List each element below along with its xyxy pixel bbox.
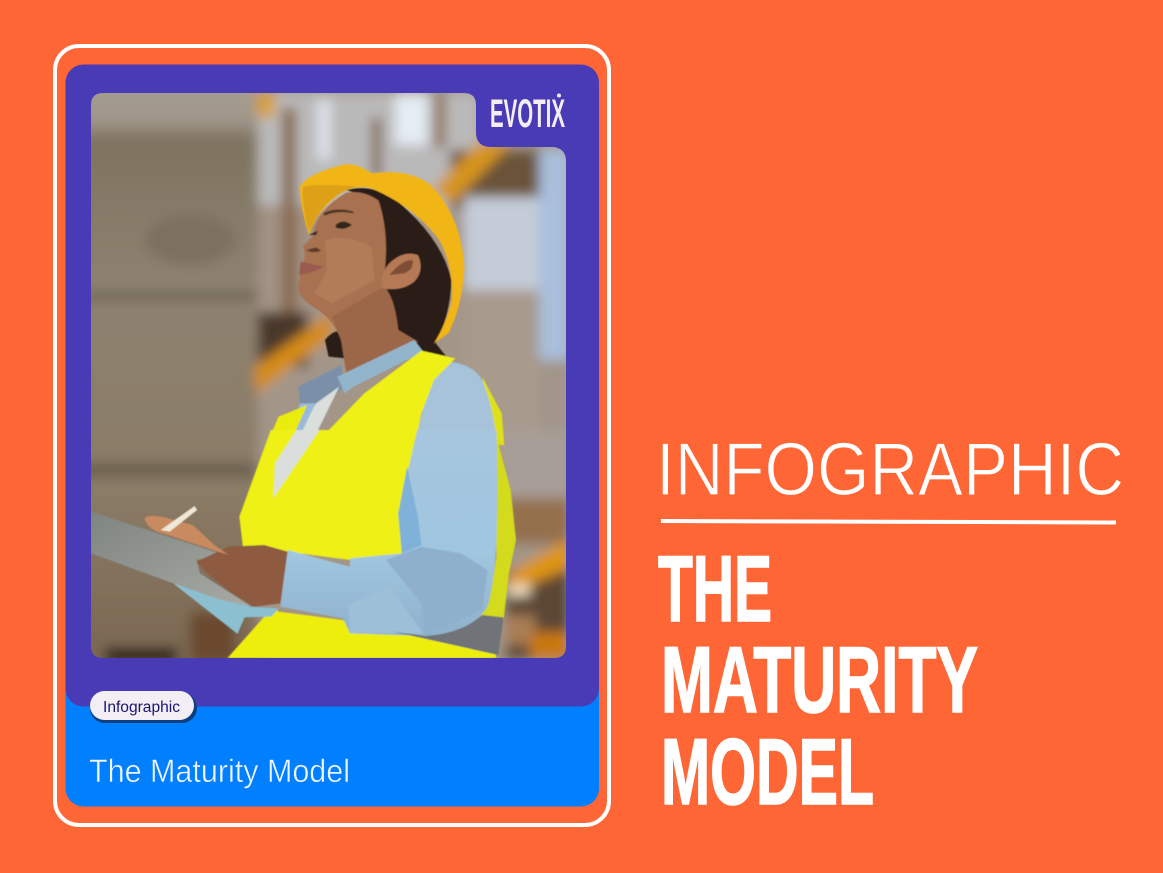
tag pill: Infographic: Infographic: [103, 699, 180, 716]
vest front: [239, 430, 417, 562]
shoulder sleeve: [417, 361, 496, 430]
nose shadow: [306, 247, 321, 252]
second eye: [309, 231, 318, 235]
ear: [382, 254, 421, 289]
left cuff: [173, 583, 279, 634]
vest main: [328, 350, 456, 431]
lips: [299, 262, 323, 275]
vest lower: [227, 608, 496, 658]
reflective strip: [393, 615, 504, 655]
lower hand: [196, 545, 287, 607]
eyebrow: [323, 210, 354, 216]
outer white frame: [55, 46, 609, 825]
hard hat brim shade: [303, 185, 357, 232]
white shirt lower: [273, 430, 320, 498]
card blue base: [66, 660, 599, 806]
vest left: [272, 404, 308, 431]
sleeve inner shade: [398, 467, 421, 553]
divider line: [661, 519, 1116, 524]
worker upper body: [266, 164, 504, 445]
worker lower body: [91, 430, 516, 658]
logo: EVOTIX: [490, 92, 565, 136]
sleeve: [280, 430, 497, 636]
shirt placket: [295, 402, 316, 430]
card: [66, 64, 599, 806]
title line 2: MATURITY: [661, 627, 978, 732]
title: [658, 536, 978, 824]
clipboard: [91, 512, 252, 607]
hair back: [325, 188, 451, 358]
vest mesh side: [479, 430, 516, 620]
title line 1: THE: [658, 536, 772, 641]
title line 3: MODEL: [661, 719, 874, 824]
card title: The Maturity Model: [89, 753, 350, 789]
worker: [91, 164, 516, 658]
fingers: [145, 516, 229, 555]
light collar: [337, 340, 423, 393]
card purple panel: [66, 64, 599, 706]
neck shade: [332, 288, 413, 372]
tag pill: Infographic: [90, 691, 197, 723]
hard hat: [300, 164, 464, 343]
sleeve cuff fold: [348, 585, 423, 633]
face and neck: [298, 192, 418, 373]
white shirt: [302, 386, 340, 430]
vest right side: [482, 377, 504, 445]
photo background: blurred warehouse: [80, 80, 580, 670]
sleeve fold: [386, 547, 487, 635]
dark collar: [298, 365, 343, 404]
pen: [161, 506, 197, 532]
ear shadow: [389, 260, 413, 275]
photo: worker in warehouse: [80, 80, 580, 670]
logo: EVOTIX: EVOTIX: [490, 92, 565, 136]
eye: [336, 222, 352, 229]
cheek highlight: [314, 238, 375, 303]
